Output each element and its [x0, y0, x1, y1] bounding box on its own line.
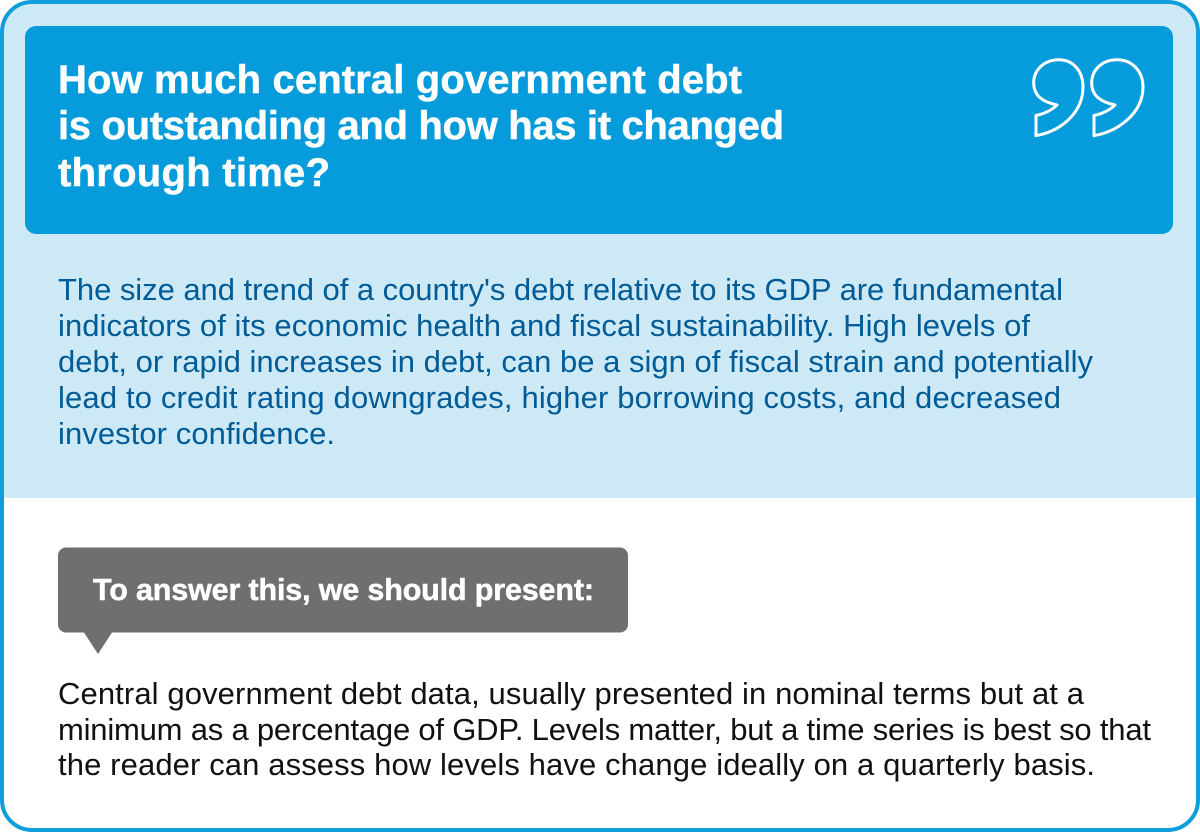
- panel: question header: [25, 26, 1173, 234]
- heading: question: How much central government debt: [58, 58, 742, 102]
- text block: answer paragraph: minimum as a percentage of GDP. Levels matter, but a time series is best so that: [58, 712, 1151, 747]
- heading: question: is outstanding and how has it changed: [58, 104, 784, 148]
- callout: to answer this: [58, 548, 628, 654]
- text block: context paragraph: investor confidence.: [58, 416, 335, 451]
- icon: quotation marks: [1034, 60, 1143, 136]
- text block: context paragraph: lead to credit rating downgrades, higher borrowing costs, and decreased: [58, 380, 1061, 415]
- heading: question: [58, 58, 784, 195]
- text block: answer paragraph: the reader can assess how levels have change ideally on a quarterly basis.: [58, 747, 1095, 782]
- heading: question: through time?: [58, 151, 330, 195]
- panel: light blue context section: [2, 2, 1198, 498]
- text block: context paragraph: [58, 272, 1094, 451]
- text block: answer paragraph: [58, 676, 1151, 782]
- callout: to answer this: To answer this, we should present:: [93, 573, 594, 607]
- text block: context paragraph: debt, or rapid increases in debt, can be a sign of fiscal strain and potentially: [58, 344, 1094, 379]
- text block: context paragraph: The size and trend of a country's debt relative to its GDP are fundamental: [58, 272, 1063, 307]
- text block: context paragraph: indicators of its economic health and fiscal sustainability. High levels of: [58, 308, 1030, 343]
- text block: answer paragraph: Central government debt data, usually presented in nominal terms but at a: [58, 676, 1085, 711]
